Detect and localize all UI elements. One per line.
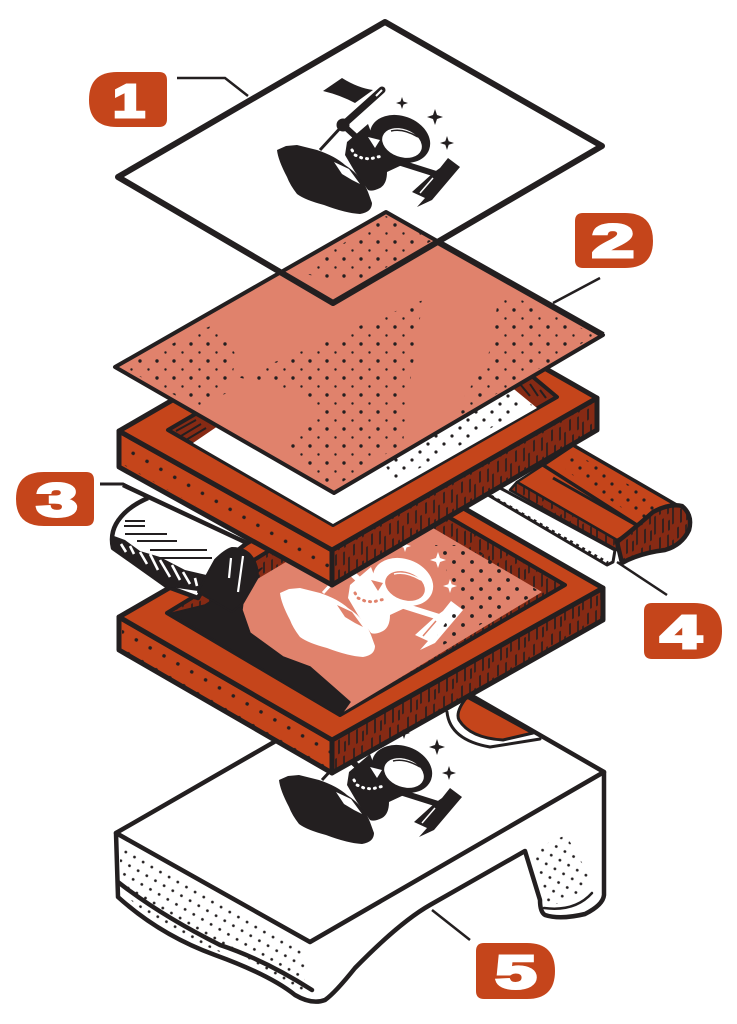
dots right corner: [447, 290, 596, 423]
badge 1: 1: [113, 76, 145, 128]
t-shirt collar: [458, 697, 533, 740]
badge 4: [644, 603, 722, 659]
handle dots: [565, 452, 665, 520]
t-shirt top edges: [116, 772, 604, 990]
upper mesh dots: [385, 390, 532, 482]
mesh stencil artwork: [280, 521, 463, 657]
print on shirt: [279, 708, 462, 844]
badge 5: 5: [496, 947, 536, 998]
mesh dots: [425, 545, 540, 655]
badge 2: [575, 213, 653, 268]
dots top: [297, 216, 433, 283]
lower screen frame: [119, 463, 603, 773]
squeegee ink blade: [198, 548, 258, 612]
handle lower face: [517, 465, 640, 540]
left wall stripes: [176, 420, 206, 440]
dots left corner: [122, 323, 237, 407]
right wall texture: [520, 384, 546, 398]
badge 2: 2: [592, 216, 634, 267]
lower frame right side: [332, 588, 603, 773]
leader line 5: [432, 910, 470, 940]
squeegee shading: [114, 536, 215, 592]
coating sheet: [115, 212, 603, 493]
lower frame left side dots: [122, 622, 330, 770]
transparent film sheet: [118, 22, 602, 303]
t-shirt sleeve dots: [532, 835, 592, 905]
badge 3: 3: [37, 475, 77, 526]
leader line 3: [100, 484, 150, 498]
upper frame top: [119, 277, 597, 550]
upper frame mesh: [193, 320, 537, 524]
handle upper face: [543, 445, 680, 527]
t-shirt body: [116, 662, 604, 1002]
t-shirt side dots: [120, 845, 305, 998]
rubber blade edge dots: [491, 496, 608, 563]
upper frame left side dots: [122, 436, 330, 582]
coated sheet: [115, 212, 603, 493]
leader line 2: [553, 278, 600, 303]
upper frame right side: [332, 398, 597, 585]
t-shirt collar band: [447, 712, 540, 747]
badge 4: 4: [661, 607, 701, 658]
blade band: [510, 482, 617, 550]
badge 3: [16, 472, 94, 526]
squeegee handle 4: [488, 445, 690, 565]
squeegee 3: [112, 485, 258, 612]
badge 5: [476, 943, 555, 999]
upper frame left side: [119, 431, 332, 585]
badge 1: [89, 72, 167, 128]
ink on mesh: [168, 568, 350, 716]
lower frame mesh: [185, 503, 542, 714]
handle end: [617, 505, 690, 563]
squeegee body: [112, 485, 247, 598]
leader line 4: [617, 562, 667, 595]
lower frame top: [119, 463, 603, 740]
rubber blade: [488, 488, 615, 565]
squeegee hatching: [124, 521, 212, 558]
handle groove: [553, 478, 636, 525]
heavier top right edge: [438, 242, 603, 335]
upper frame opening wall: [168, 303, 557, 525]
leader line 1: [177, 78, 248, 96]
t-shirt sleeve hem: [544, 893, 592, 909]
lower frame left side: [119, 617, 332, 773]
squeegee white ticks: [121, 544, 197, 586]
dots middle: [237, 300, 423, 488]
blade highlight: [229, 556, 243, 592]
upper screen frame: [119, 277, 597, 585]
t-shirt: [116, 662, 604, 1002]
artwork on film: [277, 78, 460, 214]
lower frame opening wall: [167, 480, 565, 715]
